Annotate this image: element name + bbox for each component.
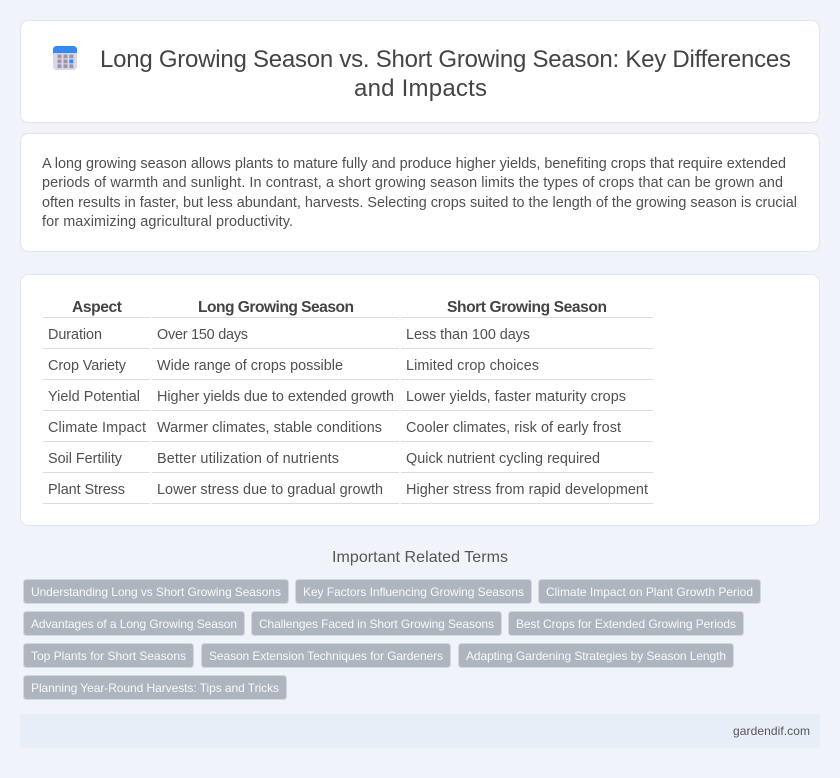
row: plant stress: Plant Stress bbox=[48, 482, 125, 498]
table header: Aspect bbox=[72, 299, 122, 316]
title: Long Growing Season vs. Short Growing Season: Key Differences bbox=[100, 46, 791, 73]
panel: related term chips: Planning Year-Round Harvests: Tips and Tricks bbox=[31, 681, 279, 695]
table header bbox=[72, 299, 607, 316]
row: duration: Less than 100 days bbox=[406, 327, 530, 343]
text block: description bbox=[42, 156, 797, 230]
panel: related term chips: Challenges Faced in Short Growing Seasons bbox=[259, 617, 494, 631]
panel: related term chips: Understanding Long vs Short Growing Seasons bbox=[31, 585, 281, 599]
text block: description: A long growing season allows plants to mature fully and produce higher yields, benefiting crops that require extended bbox=[42, 156, 786, 172]
footer bbox=[20, 714, 820, 748]
row: crop variety: Limited crop choices bbox=[406, 358, 539, 374]
row: soil fertility: Quick nutrient cycling required bbox=[406, 451, 600, 467]
heading: related terms: Important Related Terms bbox=[332, 549, 508, 566]
text block: description: often results in faster, but less abundant, harvests. Selecting crops suited to the length of the growing season is crucial bbox=[42, 195, 797, 211]
panel: related term chips bbox=[24, 580, 760, 700]
panel: related term chips: Best Crops for Extended Growing Periods bbox=[516, 617, 736, 631]
panel: description bbox=[20, 134, 820, 252]
panel: related term chips: Top Plants for Short Seasons bbox=[31, 649, 186, 663]
panel: comparison table bbox=[20, 274, 820, 526]
row: yield potential: Higher yields due to extended growth bbox=[157, 389, 394, 405]
row: yield potential: Yield Potential bbox=[48, 389, 140, 405]
row: plant stress: Lower stress due to gradual growth bbox=[157, 482, 383, 498]
panel: header bbox=[20, 20, 820, 122]
row: soil fertility bbox=[48, 451, 600, 467]
row: soil fertility: Better utilization of nutrients bbox=[157, 451, 339, 467]
panel: related term chips: Adapting Gardening Strategies by Season Length bbox=[466, 649, 726, 663]
row: climate impact: Climate Impact bbox=[48, 420, 146, 436]
row: plant stress bbox=[48, 482, 648, 498]
panel: related term chips: Climate Impact on Plant Growth Period bbox=[546, 585, 753, 599]
icon: calendar bbox=[53, 46, 77, 70]
row: plant stress: Higher stress from rapid development bbox=[406, 482, 648, 498]
row: soil fertility: Soil Fertility bbox=[48, 451, 123, 467]
row: yield potential: Lower yields, faster maturity crops bbox=[406, 389, 626, 405]
row: duration: Over 150 days bbox=[157, 327, 248, 343]
row: crop variety bbox=[48, 358, 539, 374]
footer: gardendif.com bbox=[733, 724, 810, 738]
text block: description: for maximizing agricultural productivity. bbox=[42, 214, 293, 230]
row: climate impact: Warmer climates, stable conditions bbox=[157, 420, 382, 436]
table header: Short Growing Season bbox=[447, 299, 607, 316]
panel: related term chips: Key Factors Influencing Growing Seasons bbox=[303, 585, 524, 599]
panel: related term chips: Season Extension Techniques for Gardeners bbox=[209, 649, 443, 663]
title bbox=[100, 46, 791, 102]
text block: description: periods of warmth and sunlight. In contrast, a short growing season limits the types of crops that can be grown and bbox=[42, 175, 783, 191]
row: crop variety: Crop Variety bbox=[48, 358, 127, 374]
row: crop variety: Wide range of crops possible bbox=[157, 358, 343, 374]
panel: related term chips: Advantages of a Long Growing Season bbox=[31, 617, 237, 631]
title: and Impacts bbox=[354, 75, 487, 102]
row: yield potential bbox=[48, 389, 626, 405]
row: climate impact bbox=[48, 420, 621, 436]
row: duration bbox=[48, 327, 530, 343]
row: climate impact: Cooler climates, risk of early frost bbox=[406, 420, 621, 436]
table header: Long Growing Season bbox=[198, 299, 354, 316]
row: duration: Duration bbox=[48, 327, 102, 343]
